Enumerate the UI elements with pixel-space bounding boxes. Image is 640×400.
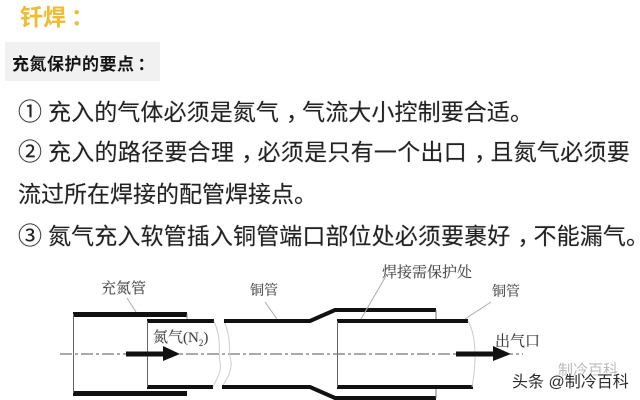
left copper pipe	[147, 319, 231, 389]
center line	[60, 353, 523, 355]
nitrogen charging hose	[73, 312, 187, 396]
label: gas outlet: 出气口	[495, 334, 540, 350]
text block: point 1: ①	[18, 99, 42, 126]
label: copper pipe left: 铜管	[250, 284, 278, 299]
leader lines	[127, 276, 491, 319]
faint watermark: 制冷百科	[558, 362, 618, 379]
heading panel: nitrogen protection key points	[5, 42, 160, 81]
middle expanded copper pipe	[222, 310, 436, 398]
text block: point 2 continued: 流过所在焊接的配管焊接点。	[18, 181, 317, 207]
arrow: nitrogen inflow	[126, 346, 180, 361]
text block: point 3: ③	[18, 223, 42, 250]
heading text: 充氮保护的要点：	[12, 55, 155, 74]
label: nitrogen N2: 氮气(N2)	[153, 330, 208, 348]
text block: point 2: ②	[18, 139, 42, 166]
text block: point 1: 充入的气体必须是氮气 ，气流大小控制要合适。	[48, 99, 533, 125]
label: weld protection point: 焊接需保护处	[382, 265, 472, 281]
text block: point 3: 氮气充入软管插入铜管端口部位处必须要裹好 ，不能漏气。	[48, 223, 640, 249]
watermark: 头条 @制冷百科	[512, 374, 629, 391]
arrow: gas outflow	[456, 346, 511, 361]
title: 钎焊：	[20, 4, 94, 30]
right copper pipe	[337, 319, 475, 389]
text block: point 2: 充入的路径要合理 ，必须是只有一个出口 ，且氮气必须要	[48, 139, 630, 165]
label: copper pipe right: 铜管	[492, 285, 520, 300]
label: nitrogen hose: 充氮管	[101, 281, 146, 297]
